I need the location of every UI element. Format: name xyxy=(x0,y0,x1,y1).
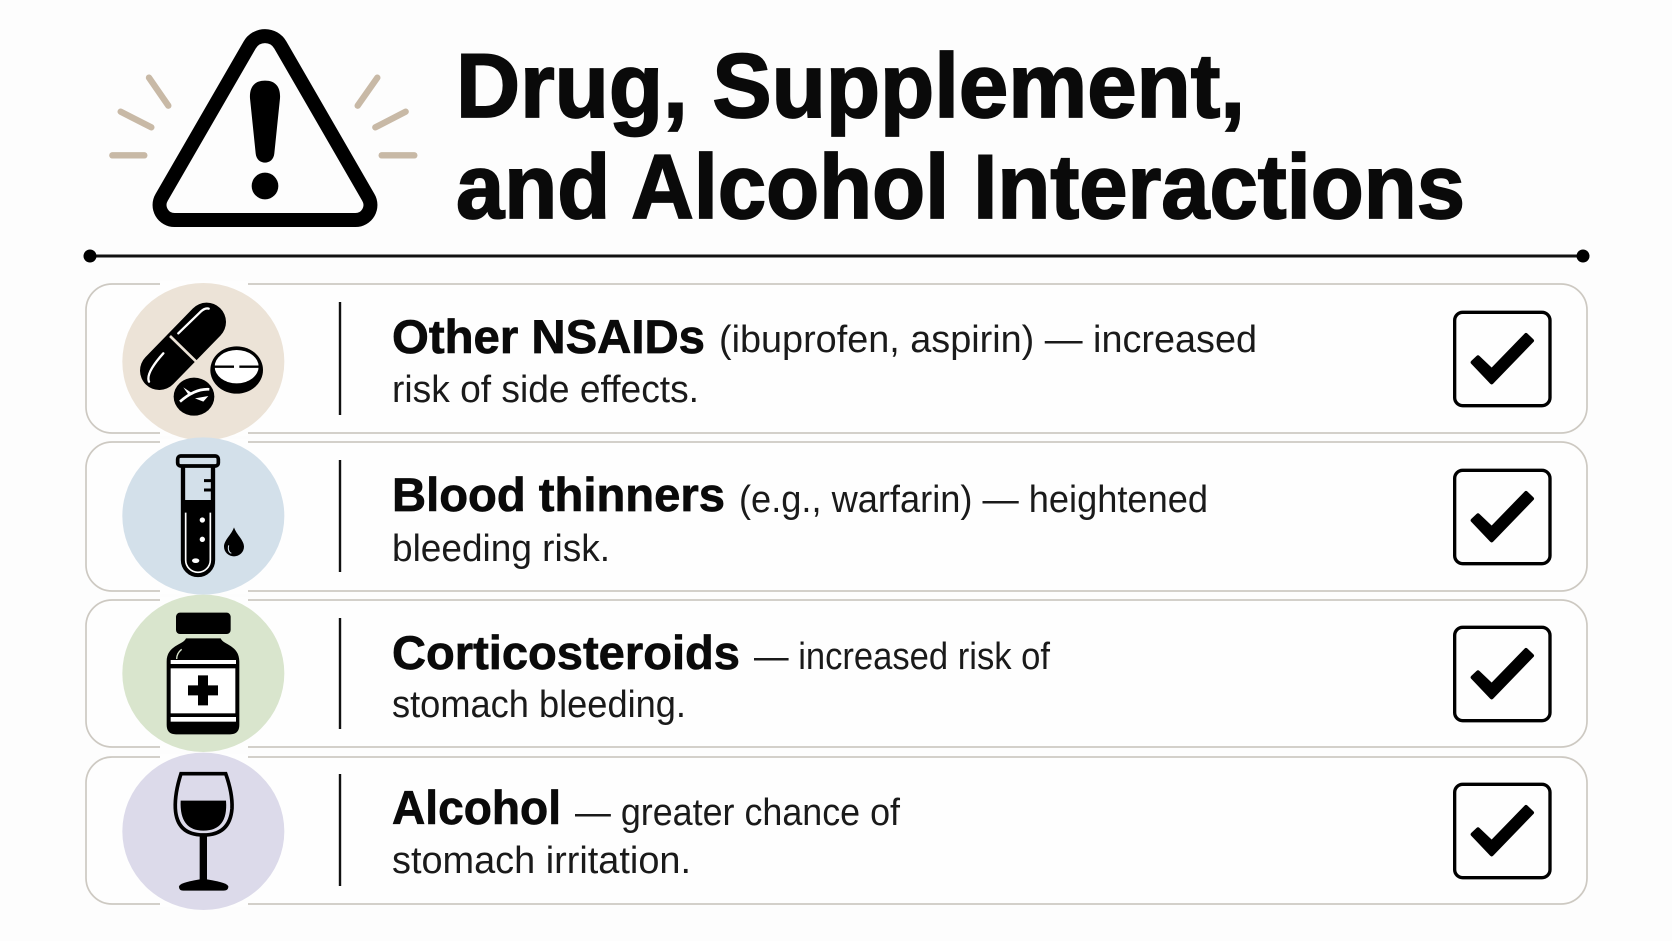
panel: Alcohol xyxy=(86,754,1587,907)
icon: checkbox 1 xyxy=(1455,312,1550,406)
title xyxy=(456,36,1465,238)
panel: Other NSAIDs xyxy=(86,281,1587,436)
divider xyxy=(339,618,341,729)
item text: Other NSAIDs xyxy=(392,310,705,363)
item text: Alcohol xyxy=(392,781,561,834)
icon: medicine bottle on green circle xyxy=(122,595,284,752)
header rule xyxy=(84,250,1590,262)
item text: Blood thinners xyxy=(392,468,725,521)
title: Drug, Supplement, xyxy=(456,36,1245,137)
icon: test tube on blue circle xyxy=(122,437,284,595)
item text xyxy=(392,626,1050,726)
item text xyxy=(392,781,900,882)
divider xyxy=(339,460,341,572)
panel: Blood thinners xyxy=(86,439,1587,594)
divider xyxy=(339,774,341,886)
item text: bleeding risk. xyxy=(392,528,610,570)
item text: stomach bleeding. xyxy=(392,684,686,726)
panel: Corticosteroids xyxy=(86,597,1587,750)
icon: checkbox 3 xyxy=(1455,627,1550,721)
item text xyxy=(392,468,1208,570)
title: and Alcohol Interactions xyxy=(456,137,1465,238)
icon: warning triangle xyxy=(112,36,414,220)
item text: Corticosteroids xyxy=(392,626,740,679)
icon: checkbox 4 xyxy=(1455,784,1550,878)
icon: wine glass on lavender circle xyxy=(122,753,284,910)
icon: pills on beige circle xyxy=(122,283,284,440)
divider xyxy=(339,302,341,415)
item text: (ibuprofen, aspirin) — increased xyxy=(719,319,1257,361)
item text: — increased risk of xyxy=(754,636,1050,678)
item text: — greater chance of xyxy=(575,792,900,834)
item text: stomach irritation. xyxy=(392,840,691,882)
item text xyxy=(392,310,1257,411)
icon: checkbox 2 xyxy=(1455,470,1550,564)
item text: risk of side effects. xyxy=(392,369,699,411)
item text: (e.g., warfarin) — heightened xyxy=(739,479,1208,521)
